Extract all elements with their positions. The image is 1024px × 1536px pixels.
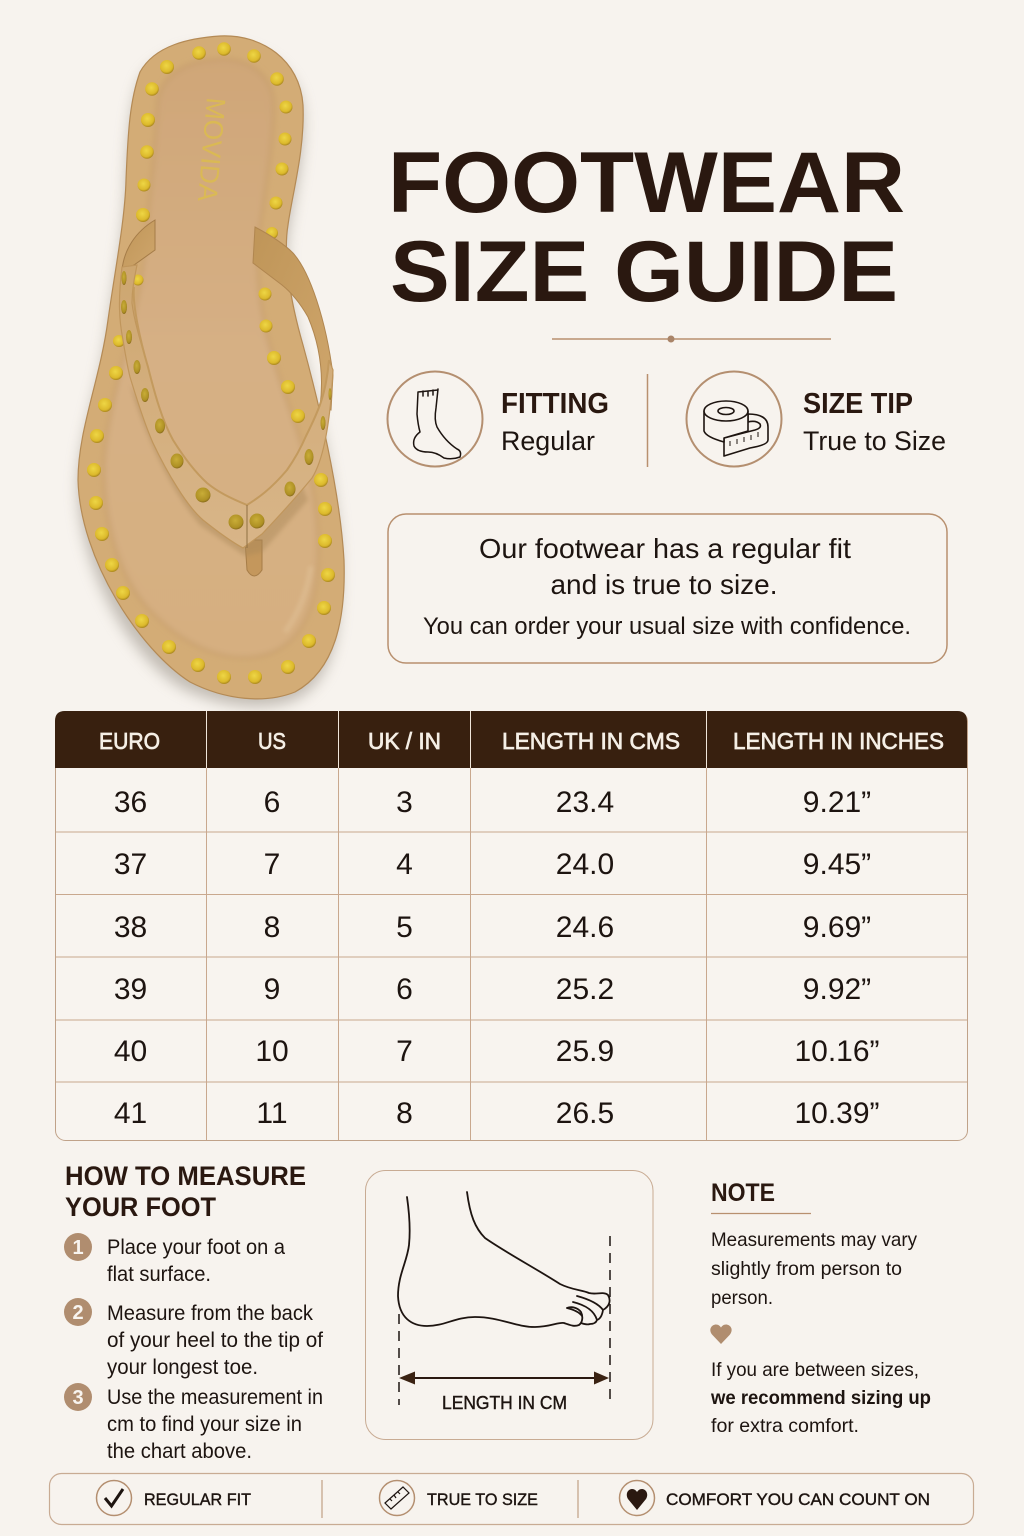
size table: [55, 711, 968, 1140]
table rows: 9.69”: [803, 911, 871, 944]
step 1: Place your foot on a: [107, 1236, 285, 1259]
note: NOTE: [711, 1179, 775, 1207]
table rows: 4: [396, 848, 413, 881]
table rows: 6: [264, 786, 280, 819]
table header: LENGTH IN INCHES: [733, 728, 944, 754]
callout: You can order your usual size with confidence.: [423, 613, 911, 640]
table rows: 10.39”: [794, 1097, 880, 1130]
table rows: 38: [114, 911, 147, 944]
size tip badge: SIZE TIP: [803, 388, 913, 420]
table rows: 6: [396, 973, 413, 1006]
true to size: [380, 1480, 538, 1516]
regular fit: REGULAR FIT: [144, 1490, 251, 1509]
table rows: 11: [256, 1097, 288, 1130]
thong post: [245, 540, 262, 576]
note: slightly from person to: [711, 1258, 902, 1280]
table rows: 9: [264, 973, 280, 1006]
v strap: [119, 265, 333, 548]
strap shadow: [130, 385, 308, 556]
table rows: 9.21”: [803, 786, 871, 819]
heading: [65, 1161, 306, 1222]
table rows: 37: [114, 848, 147, 881]
icon: measuring tape: [686, 372, 782, 466]
title: SIZE GUIDE: [390, 224, 898, 320]
right strap back: [253, 227, 333, 410]
table header: EURO: [99, 728, 160, 754]
note: If you are between sizes,: [711, 1359, 919, 1381]
step 1: flat surface.: [107, 1263, 211, 1286]
step 3: Use the measurement in: [107, 1386, 323, 1409]
step 2: [64, 1298, 323, 1379]
foot measurement diagram: [366, 1170, 653, 1440]
comfort: [620, 1480, 930, 1516]
title: [388, 135, 905, 320]
note: for extra comfort.: [711, 1415, 859, 1437]
step 2: of your heel to the tip of: [107, 1329, 323, 1352]
table rows: [114, 786, 880, 1130]
step 1: [64, 1233, 285, 1286]
brand mark: MOVIDA: [192, 96, 231, 203]
step 1: 1: [72, 1237, 84, 1259]
table rows: 7: [396, 1035, 413, 1068]
step 3: [64, 1383, 323, 1463]
table rows: 39: [114, 973, 147, 1006]
fitting badge: FITTING: [501, 388, 609, 420]
step 2: 2: [72, 1302, 84, 1324]
bottom feature strip: [50, 1474, 974, 1524]
table rows: 5: [396, 911, 413, 944]
table rows: 8: [396, 1097, 413, 1130]
table rows: 9.92”: [803, 973, 871, 1006]
step 3: cm to find your size in: [107, 1413, 302, 1436]
callout: and is true to size.: [550, 569, 778, 600]
table header: [55, 711, 967, 768]
arrow: length: [399, 1372, 609, 1384]
callout: Our footwear has a regular fit: [479, 533, 851, 564]
table rows: 25.9: [556, 1035, 614, 1068]
callout: [388, 514, 947, 663]
heading: YOUR FOOT: [65, 1192, 216, 1222]
table rows: 36: [114, 786, 147, 819]
note: Measurements may vary: [711, 1229, 917, 1251]
icon: heart: [710, 1324, 732, 1344]
table header: UK / IN: [368, 728, 441, 754]
table rows: 24.6: [556, 911, 614, 944]
left strap anchor: [122, 220, 155, 270]
table rows: 3: [396, 786, 413, 819]
heading: HOW TO MEASURE: [65, 1161, 306, 1191]
size tip badge: [686, 372, 946, 466]
sandal photo: [78, 36, 344, 707]
table rows: 9.45”: [803, 848, 871, 881]
table rows: 8: [264, 911, 280, 944]
icon: foot: [388, 372, 482, 466]
table header: LENGTH IN CMS: [502, 728, 680, 754]
step 3: the chart above.: [107, 1440, 252, 1463]
table rows: 40: [114, 1035, 147, 1068]
table rows: 41: [114, 1097, 147, 1130]
true to size: TRUE TO SIZE: [427, 1490, 538, 1509]
foot measurement diagram: LENGTH IN CM: [442, 1393, 567, 1413]
comfort: COMFORT YOU CAN COUNT ON: [666, 1490, 930, 1509]
table rows: 7: [264, 848, 280, 881]
table rows: 23.4: [556, 786, 614, 819]
sole studs: [87, 42, 335, 684]
note: [710, 1179, 931, 1437]
step 3: 3: [72, 1387, 84, 1409]
note: we recommend sizing up: [710, 1387, 931, 1409]
table rows: 26.5: [556, 1097, 614, 1130]
table rows: 24.0: [556, 848, 614, 881]
table rows: 25.2: [556, 973, 614, 1006]
icon: foot outline: [398, 1192, 610, 1327]
regular fit: [96, 1480, 251, 1516]
table rows: 10: [255, 1035, 289, 1068]
fitting badge: Regular: [501, 426, 595, 456]
strap studs: [121, 271, 332, 530]
step 2: Measure from the back: [107, 1302, 313, 1325]
step 2: your longest toe.: [107, 1356, 258, 1379]
how to measure: [64, 1161, 323, 1463]
table header: US: [258, 728, 286, 754]
size tip badge: True to Size: [803, 426, 946, 456]
table rows: 10.16”: [794, 1035, 880, 1068]
note: person.: [711, 1287, 773, 1309]
fitting badge: [388, 372, 609, 466]
title: FOOTWEAR: [388, 135, 905, 231]
